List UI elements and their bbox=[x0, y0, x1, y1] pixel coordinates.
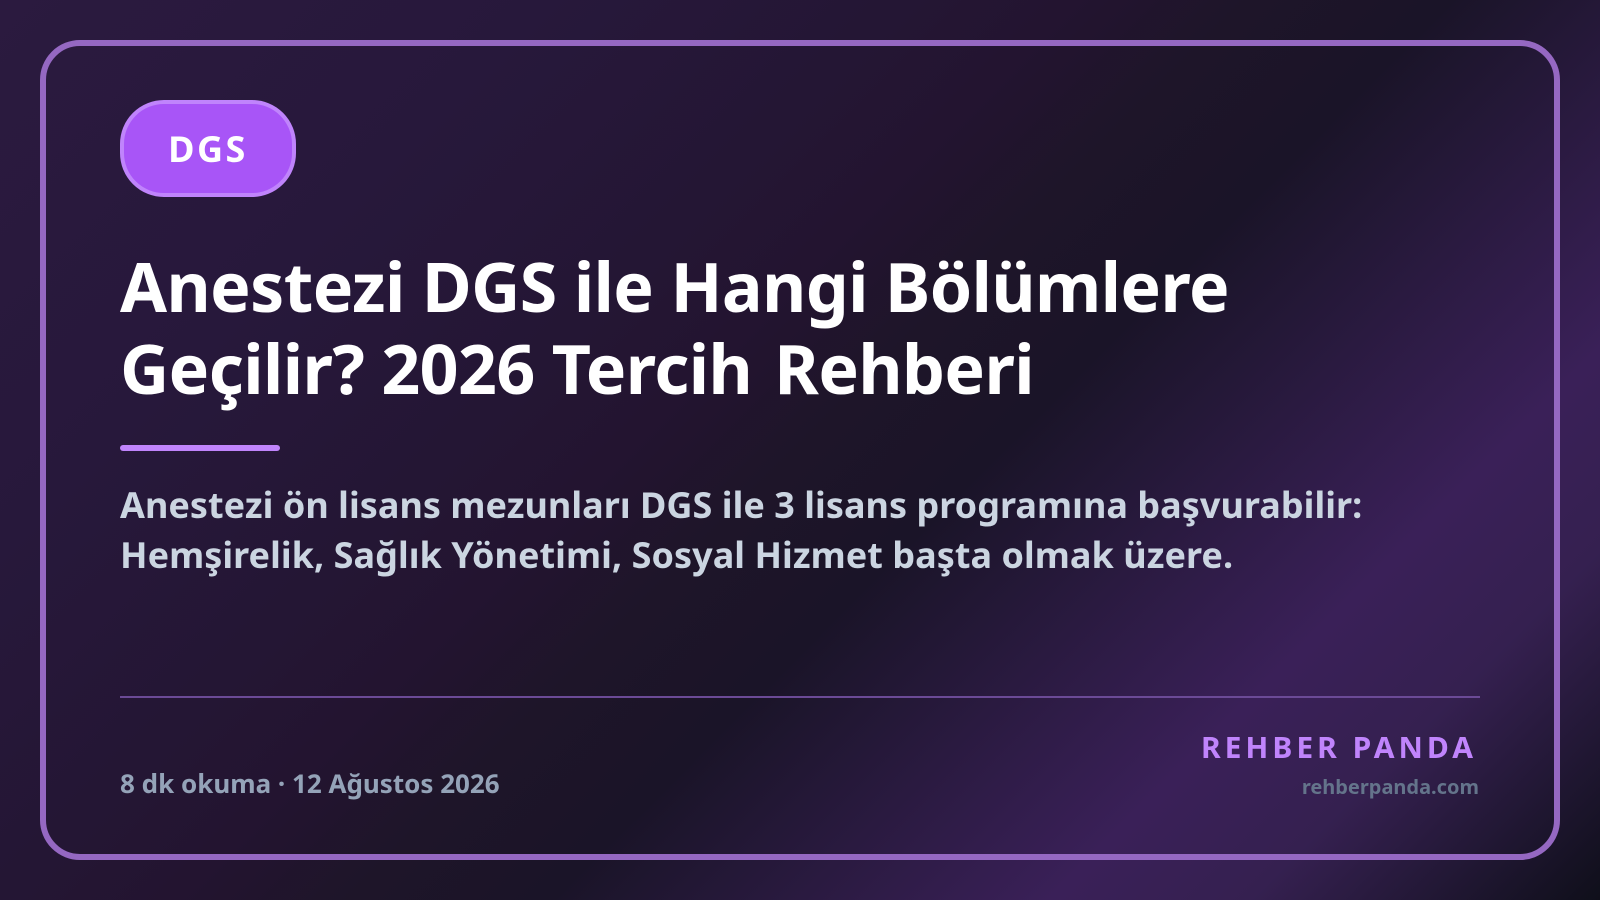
badge: DGS: DGS bbox=[168, 124, 248, 173]
title: Geçilir? 2026 Tercih Rehberi bbox=[120, 321, 1034, 414]
subtitle text: Hemşirelik, Sağlık Yönetimi, Sosyal Hizmet başta olmak üzere. bbox=[120, 530, 1233, 579]
website url: rehberpanda.com bbox=[1302, 773, 1479, 800]
title bbox=[120, 239, 1229, 414]
footer rule bbox=[120, 696, 1480, 698]
subtitle text bbox=[120, 480, 1362, 579]
badge: DGS bbox=[120, 100, 296, 197]
title: Anestezi DGS ile Hangi Bölümlere bbox=[120, 239, 1229, 332]
reading time and date: 8 dk okuma · 12 Ağustos 2026 bbox=[120, 765, 500, 801]
accent divider bbox=[120, 445, 280, 451]
subtitle text: Anestezi ön lisans mezunları DGS ile 3 lisans programına başvurabilir: bbox=[120, 480, 1362, 529]
brand name: REHBER PANDA bbox=[1201, 726, 1477, 767]
